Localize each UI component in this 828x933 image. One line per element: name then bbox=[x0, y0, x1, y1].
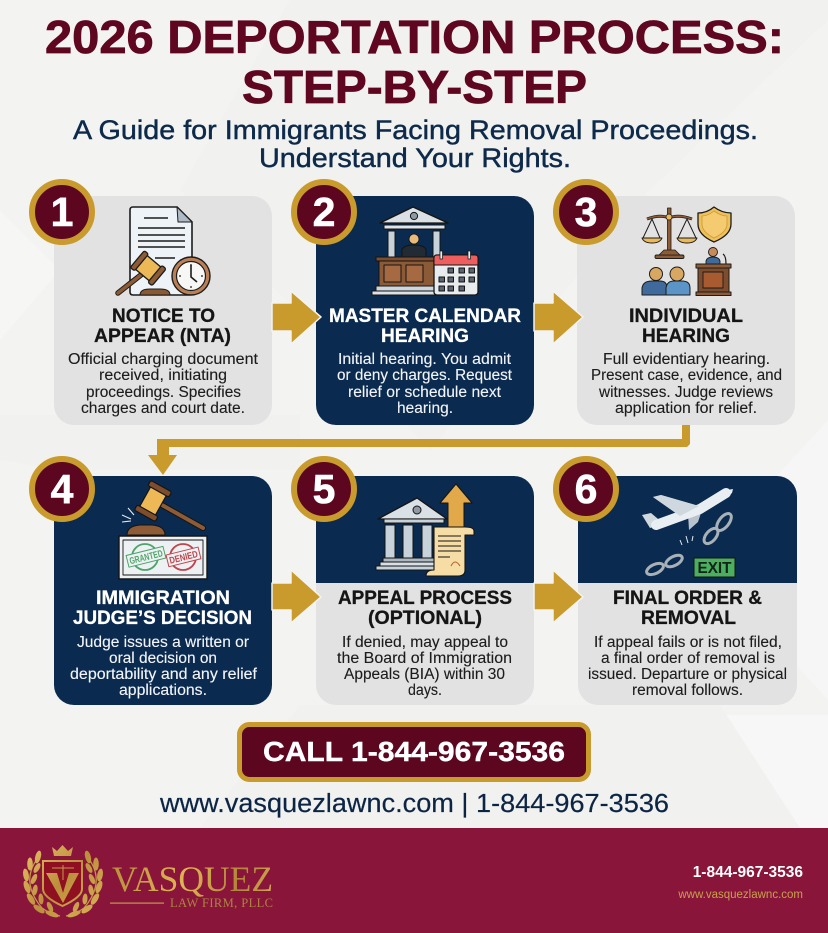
logo emblem bbox=[22, 845, 104, 919]
title: final order and removal: REMOVAL bbox=[641, 607, 736, 629]
text: final order description: a final order of removal is bbox=[601, 650, 775, 667]
icon: courthouse and calendar bbox=[372, 207, 478, 295]
badge: step 2: 2 bbox=[313, 189, 335, 235]
text: appeal process description: Appeals (BIA) within 30 bbox=[344, 666, 505, 683]
text: master calendar description: Initial hearing. You admit bbox=[338, 351, 512, 368]
title: STEP-BY-STEP bbox=[242, 61, 587, 113]
text: individual hearing description: application for relief. bbox=[615, 400, 757, 417]
text: master calendar description: or deny charges. Request bbox=[337, 367, 513, 384]
text: individual hearing description bbox=[591, 351, 782, 417]
text: individual hearing description: Present case, evidence, and bbox=[591, 367, 782, 384]
title: immigration judge's decision: JUDGE’S DECISION bbox=[73, 607, 252, 629]
badge: step 6 bbox=[556, 459, 616, 519]
footer website: www.vasquezlawnc.com bbox=[677, 889, 803, 901]
text: notice to appear description: charges and court date. bbox=[81, 400, 245, 417]
badge: step 1 bbox=[32, 182, 92, 242]
title: 2026 DEPORTATION PROCESS: bbox=[45, 11, 784, 63]
panel: step 1 notice to appear bbox=[54, 196, 272, 425]
text: final order description bbox=[588, 634, 787, 699]
badge: step 4: 4 bbox=[51, 466, 74, 512]
panel: step 2 master calendar hearing bbox=[316, 196, 534, 425]
icon: document gavel clock bbox=[118, 207, 210, 295]
title: master calendar hearing: HEARING bbox=[381, 325, 469, 347]
badge: step 6: 6 bbox=[575, 466, 597, 512]
text: notice to appear description bbox=[68, 351, 259, 417]
title: individual hearing: HEARING bbox=[642, 325, 730, 347]
text: judge's decision description: Judge issues a written or bbox=[77, 634, 249, 651]
footer phone: 1-844-967-3536 bbox=[693, 864, 803, 881]
title: appeal process bbox=[338, 587, 512, 629]
text: final order description: issued. Departure or physical bbox=[588, 666, 787, 683]
title: immigration judge's decision: IMMIGRATION bbox=[96, 587, 230, 609]
badge: step 4 bbox=[32, 459, 92, 519]
arrow: step 2 to 3 bbox=[534, 291, 583, 344]
contact line: www.vasquezlawnc.com | 1-844-967-3536 bbox=[159, 790, 669, 818]
icon: gavel and stamped certificate bbox=[119, 480, 207, 579]
icon: plane broken chain exit sign bbox=[642, 489, 735, 577]
icon: gavel and stamped certificate: DENIED bbox=[168, 549, 199, 567]
text: appeal process description: days. bbox=[408, 682, 442, 699]
arrow: step 4 to 5 bbox=[272, 570, 321, 623]
text: final order description: If appeal fails or is not filed, bbox=[594, 634, 782, 651]
subtitle: Understand Your Rights. bbox=[259, 143, 571, 173]
icon: gavel and stamped certificate: GRANTED bbox=[128, 548, 164, 567]
logo wordmark: VASQUEZ bbox=[112, 859, 273, 899]
title: notice to appear bbox=[94, 305, 231, 347]
title: individual hearing bbox=[629, 305, 743, 347]
title: notice to appear: APPEAR (NTA) bbox=[94, 325, 231, 347]
text: master calendar description: hearing. bbox=[397, 400, 453, 417]
title: immigration judge's decision bbox=[73, 587, 252, 629]
icon: scales shield people podium bbox=[642, 207, 731, 296]
arrow: step 3 to 4 connector bbox=[148, 425, 690, 475]
text: judge's decision description: applications. bbox=[119, 682, 207, 699]
call button bbox=[240, 724, 588, 780]
title: appeal process: APPEAL PROCESS bbox=[338, 587, 512, 609]
text: final order description: removal follows. bbox=[632, 682, 743, 699]
subtitle bbox=[73, 115, 758, 173]
subtitle: A Guide for Immigrants Facing Removal Proceedings. bbox=[73, 115, 758, 145]
panel: step 4 immigration judge's decision bbox=[54, 476, 272, 705]
text: notice to appear description: Official charging document bbox=[68, 351, 259, 368]
panel: step 6 final order and removal bbox=[578, 476, 797, 705]
text: individual hearing description: Full evidentiary hearing. bbox=[603, 351, 770, 368]
text: judge's decision description: oral decision on bbox=[109, 650, 217, 667]
title: master calendar hearing: MASTER CALENDAR bbox=[329, 305, 521, 327]
badge: step 5 bbox=[294, 459, 354, 519]
text: appeal process description: the Board of Immigration bbox=[337, 650, 512, 667]
text: appeal process description bbox=[337, 634, 512, 699]
text: individual hearing description: witnesses. Judge reviews bbox=[598, 384, 773, 401]
title: appeal process: (OPTIONAL) bbox=[368, 607, 482, 629]
arrow: step 1 to 2 bbox=[272, 291, 321, 344]
text: master calendar description bbox=[337, 351, 513, 417]
title: final order and removal: FINAL ORDER & bbox=[613, 587, 762, 609]
text: appeal process description: If denied, may appeal to bbox=[342, 634, 508, 651]
title: individual hearing: INDIVIDUAL bbox=[629, 305, 743, 327]
badge: step 3 bbox=[556, 182, 616, 242]
badge: step 5: 5 bbox=[313, 466, 335, 512]
title bbox=[45, 11, 784, 113]
footer band bbox=[0, 828, 828, 933]
text: master calendar description: relief or schedule next bbox=[348, 384, 502, 401]
badge: step 1: 1 bbox=[51, 189, 73, 235]
title: final order and removal bbox=[613, 587, 762, 629]
panel: step 5 appeal process bbox=[316, 476, 534, 705]
badge: step 3: 3 bbox=[575, 189, 597, 235]
text: judge's decision description: deportability and any relief bbox=[70, 666, 258, 683]
title: notice to appear: NOTICE TO bbox=[112, 305, 215, 327]
logo wordmark: LAW FIRM, PLLC bbox=[170, 896, 273, 910]
panel: step 3 individual hearing bbox=[577, 196, 795, 425]
text: judge's decision description bbox=[70, 634, 258, 699]
title: master calendar hearing bbox=[329, 305, 521, 347]
text: notice to appear description: received, initiating bbox=[99, 367, 227, 384]
call button: CALL 1-844-967-3536 bbox=[263, 736, 565, 767]
badge: step 2 bbox=[294, 182, 354, 242]
text: notice to appear description: proceedings. Specifies bbox=[86, 384, 241, 401]
arrow: step 5 to 6 bbox=[534, 570, 583, 623]
icon: plane broken chain exit sign: EXIT bbox=[698, 560, 732, 577]
icon: courthouse arrow scroll bbox=[376, 484, 474, 576]
